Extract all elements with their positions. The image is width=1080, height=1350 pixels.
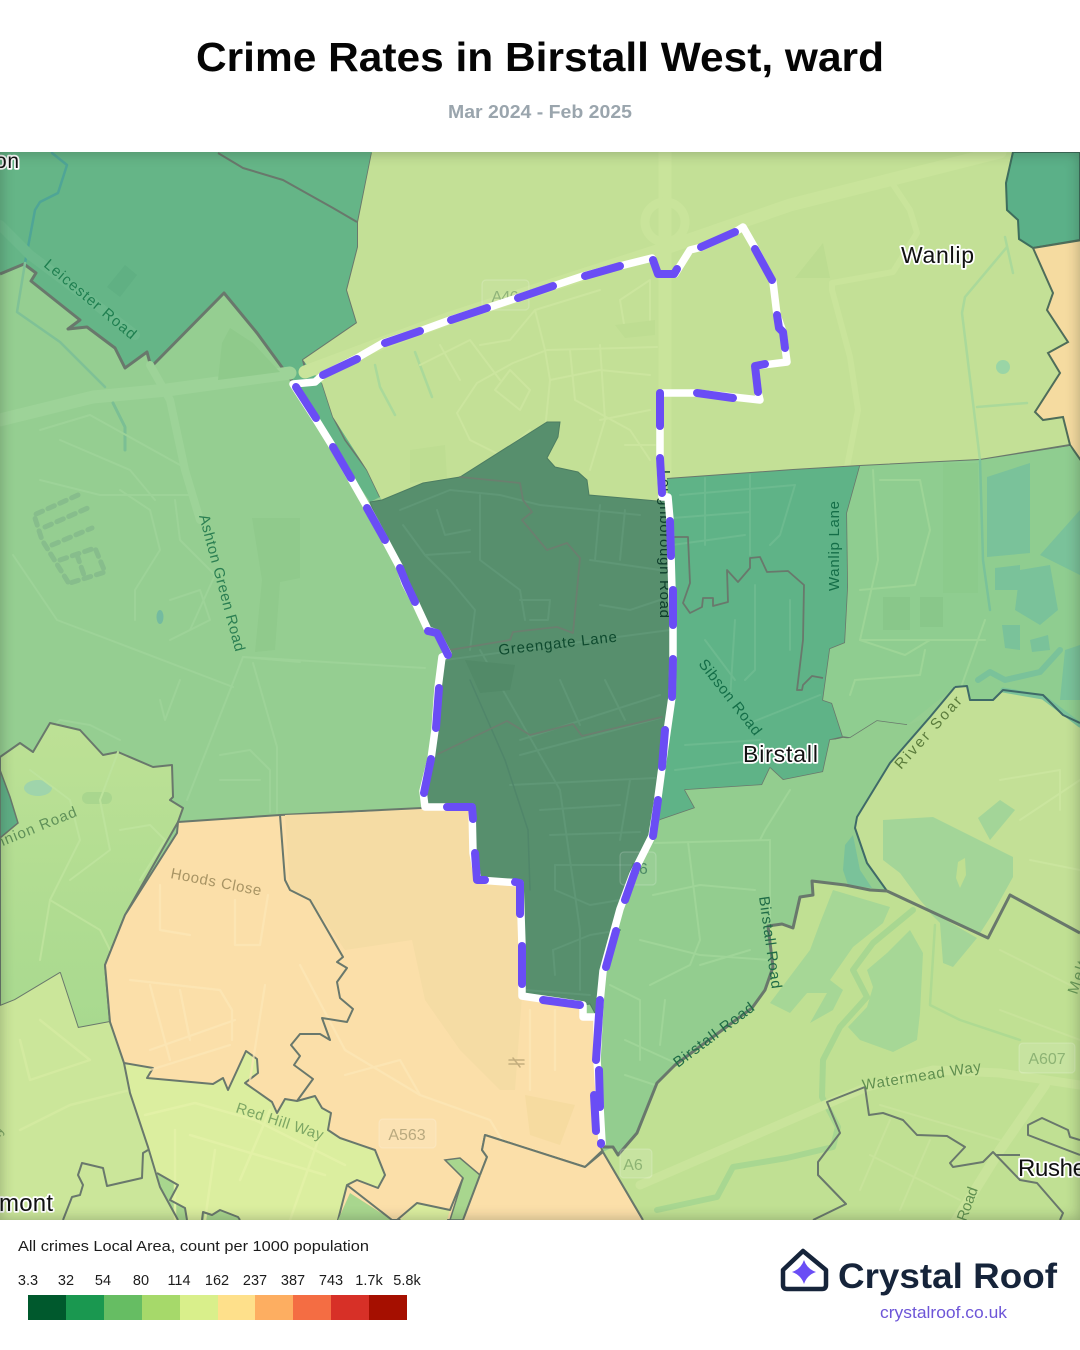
Birstall West ward boundary: white line with purple dashes bbox=[293, 227, 787, 1144]
subtitle: date range: Mar 2024 - Feb 2025 bbox=[448, 102, 632, 122]
legend scale labels: 1.7k bbox=[355, 1273, 383, 1289]
legend scale labels: 5.8k bbox=[393, 1273, 421, 1289]
map road and place labels: Loughborough Road bbox=[656, 470, 673, 618]
map road and place labels: Birstall bbox=[743, 741, 818, 767]
map edge vignette bbox=[0, 152, 1080, 1220]
legend colour bar bbox=[28, 1295, 407, 1320]
map road and place labels: A607 bbox=[1028, 1051, 1066, 1068]
brand url: crystalroof.co.uk bbox=[880, 1304, 1008, 1322]
brand name: Crystal Roof bbox=[838, 1257, 1057, 1296]
map road and place labels: A563 bbox=[388, 1127, 426, 1144]
choropleth map bbox=[0, 150, 1080, 1223]
legend scale labels: 80 bbox=[133, 1273, 149, 1289]
legend scale labels: 3.3 bbox=[18, 1273, 38, 1289]
region: south-west pale green bbox=[0, 973, 385, 1220]
legend scale labels: 32 bbox=[58, 1273, 74, 1289]
region: west light green streets bbox=[16, 262, 296, 624]
map road and place labels: A6 bbox=[628, 861, 648, 878]
region: Nion Road green bbox=[0, 723, 183, 1028]
icon: Crystal Roof house logo bbox=[783, 1251, 826, 1289]
map road and place labels: Sibson Road bbox=[695, 656, 765, 739]
legend scale labels: 237 bbox=[243, 1273, 267, 1289]
map road and place labels: A6 bbox=[623, 1157, 643, 1174]
map road and place labels: Ashton Green Road bbox=[195, 513, 248, 653]
region: Wanlip and Birstall north pale green bbox=[303, 152, 1070, 501]
title: Crime Rates in Birstall West, ward bbox=[196, 34, 884, 80]
region: north-west dark green bbox=[0, 152, 380, 502]
region: south orange high-crime wards bbox=[105, 807, 643, 1220]
map road and place labels: Greengate Lane bbox=[498, 629, 618, 659]
road label badges bbox=[379, 280, 1075, 1178]
region: River Soar east pale green bbox=[854, 685, 1080, 936]
region: north-east orange edge bbox=[1033, 240, 1080, 462]
region: south-east Watermead pale green bbox=[603, 881, 1080, 1222]
map road and place labels: Leicester Road bbox=[40, 256, 139, 343]
map road and place labels: Hoods Close bbox=[169, 865, 263, 899]
region: Birstall centre green bbox=[652, 466, 860, 836]
legend scale labels: 387 bbox=[281, 1273, 305, 1289]
map road and place labels bbox=[0, 150, 1080, 1223]
legend scale labels: 743 bbox=[319, 1273, 343, 1289]
legend title: All crimes Local Area, count per 1000 population bbox=[18, 1238, 369, 1255]
map road and place labels: Wanlip Lane bbox=[826, 501, 843, 591]
region: north-east dark green corner bbox=[1006, 152, 1080, 248]
legend scale labels: 54 bbox=[95, 1273, 111, 1289]
map road and place labels: River Soar bbox=[891, 693, 966, 773]
map road and place labels: Wanlip bbox=[901, 242, 974, 268]
map road and place labels: Red Hill Way bbox=[234, 1100, 326, 1144]
map road and place labels: Watermead Way bbox=[861, 1058, 983, 1094]
legend scale labels bbox=[18, 1273, 421, 1289]
region: east lower Birstall green bbox=[609, 721, 907, 1086]
legend scale labels: 114 bbox=[167, 1273, 191, 1289]
map road and place labels: Birstall Road bbox=[755, 895, 785, 990]
region: east Birstall mid green bbox=[823, 446, 1080, 738]
map road and place labels: Road bbox=[954, 1185, 982, 1223]
map road and place labels: A46 bbox=[492, 289, 519, 306]
region: Birstall West target ward dark bbox=[370, 422, 673, 1017]
map road and place labels: Birstall Road bbox=[670, 999, 758, 1071]
map road and place labels: mont bbox=[0, 1190, 53, 1217]
legend scale labels: 162 bbox=[205, 1273, 229, 1289]
